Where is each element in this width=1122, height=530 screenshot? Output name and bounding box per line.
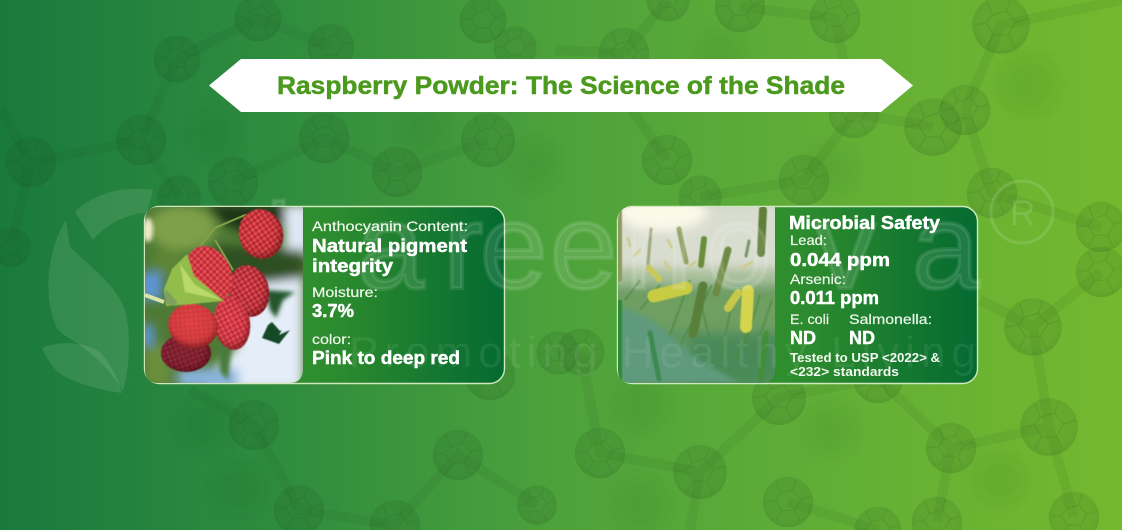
title banner [209, 59, 913, 112]
watermark: registered mark [991, 181, 1053, 243]
panel: microbial card base [610, 194, 978, 385]
photo: microbes on grass [618, 207, 775, 383]
watermark: tagline: Promoting Healthy Living [349, 328, 976, 377]
panel: raspberry card base [144, 206, 504, 384]
value: arsenic ppm: 0.011 ppm [790, 288, 879, 308]
watermark: registered mark: R [1010, 194, 1035, 233]
label: e. coli: E. coli [790, 311, 829, 327]
text: raspberry card specifications [312, 218, 468, 368]
value: color range: Pink to deep red [312, 348, 460, 368]
text: microbial card specifications [789, 213, 940, 379]
watermark: wordmark: dareenova [225, 178, 980, 314]
value: natural pigment integrity: integrity [312, 256, 393, 276]
label: color: color: [312, 331, 351, 347]
note: testing standards: <232> standards [790, 364, 899, 379]
brand watermark [42, 178, 1053, 393]
value: moisture percent: 3.7% [312, 301, 354, 321]
heading: microbial safety: Microbial Safety [789, 213, 940, 233]
label: salmonella: Salmonella: [849, 311, 932, 327]
value: salmonella result: ND [849, 328, 875, 348]
watermark: leaf logo [42, 189, 153, 393]
value: lead ppm: 0.044 ppm [790, 250, 890, 270]
raspberry fruit cluster [161, 204, 289, 372]
label: lead: Lead: [790, 232, 827, 248]
label: arsenic: Arsenic: [790, 271, 846, 287]
title text: Raspberry Powder: The Science of the Shade [277, 72, 845, 100]
label: moisture: Moisture: [312, 284, 378, 300]
value: e. coli result: ND [790, 328, 816, 348]
value: natural pigment integrity: Natural pigment [312, 236, 467, 256]
label: anthocyanin content: Anthocyanin Content: [312, 218, 468, 234]
note: testing standards: Tested to USP <2022> & [790, 350, 940, 365]
microbe rods [619, 209, 766, 379]
photo: raspberries [145, 207, 303, 383]
